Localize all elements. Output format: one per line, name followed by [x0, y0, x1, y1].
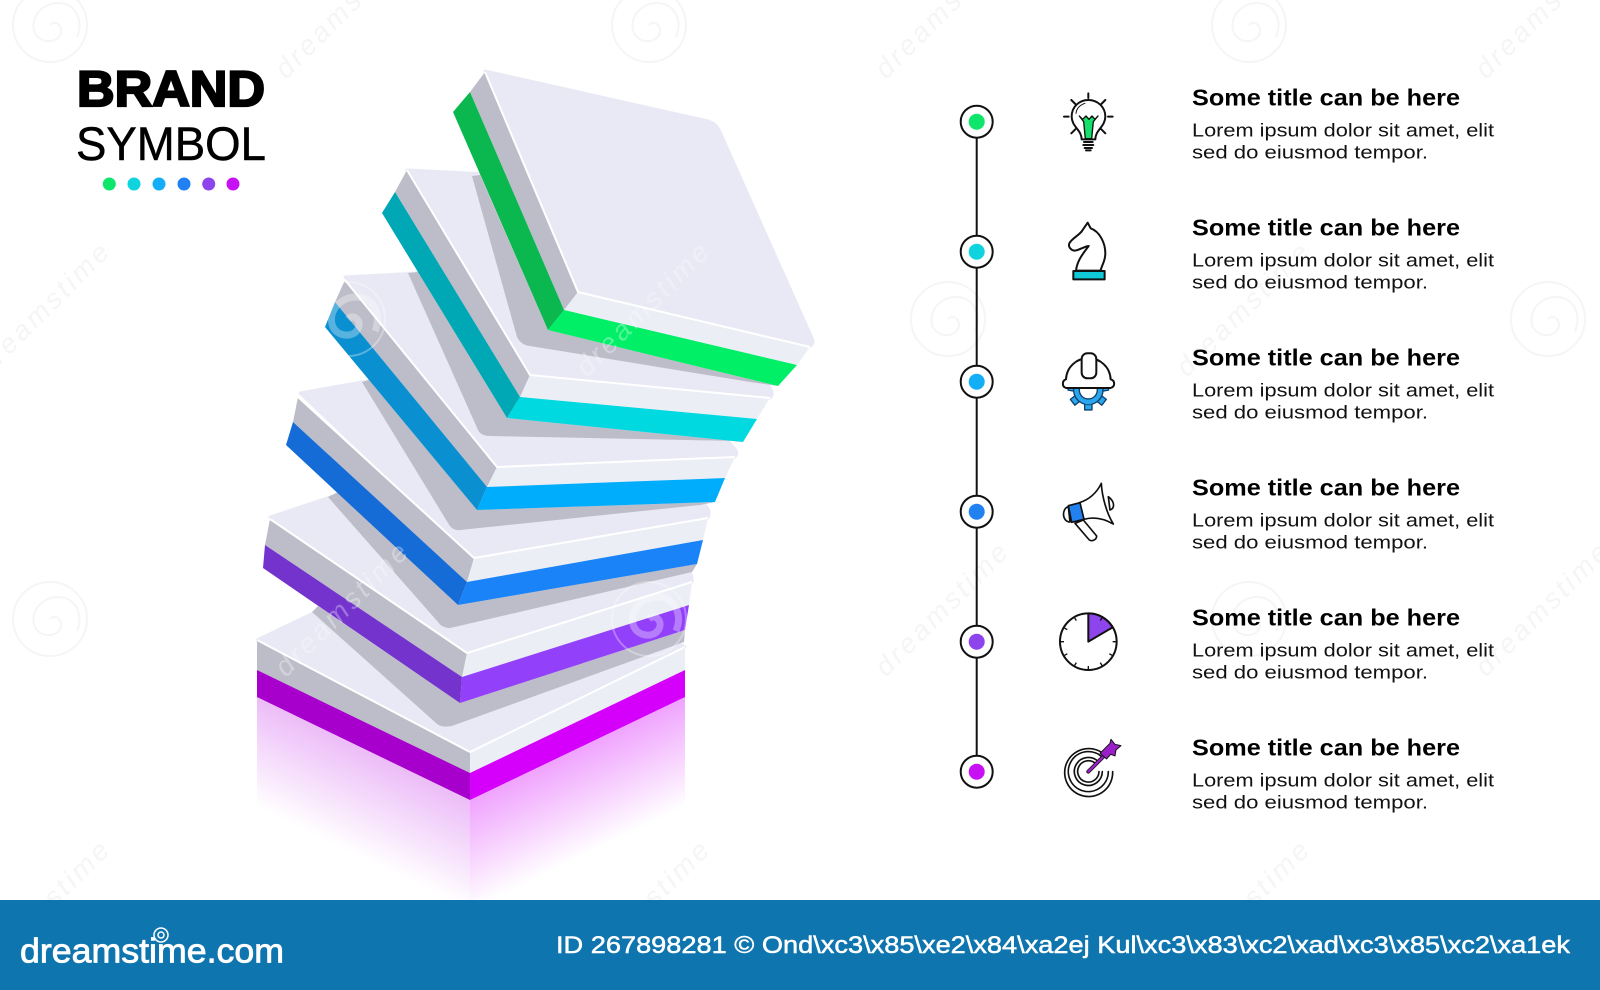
title: Some title can be here [1192, 345, 1460, 371]
node 5 [961, 626, 993, 658]
item 5 text [1192, 605, 1494, 683]
3D stack of slabs [257, 71, 813, 900]
background watermark spirals [13, 0, 1585, 656]
icon: helmet and gear [1063, 353, 1114, 410]
description: sed do eiusmod tempor. [1192, 403, 1428, 423]
watermark text on background: dreamstime [1169, 835, 1315, 980]
icon: megaphone [1064, 483, 1114, 541]
item 6 text [1192, 735, 1494, 813]
slab 5: purple [263, 442, 697, 703]
description: Lorem ipsum dolor sit amet, elit [1192, 641, 1494, 661]
slab 4: blue [286, 351, 715, 605]
timeline [961, 106, 993, 788]
description [1192, 771, 1494, 813]
slab 2: cyan [382, 170, 778, 442]
description: sed do eiusmod tempor. [1192, 533, 1428, 553]
icon: light bulb [1064, 93, 1113, 150]
description: Lorem ipsum dolor sit amet, elit [1192, 121, 1494, 141]
footer logo: dreamstime.com [20, 933, 284, 971]
watermarks over stack: dreamstime [268, 537, 414, 682]
brand logo [76, 61, 266, 190]
watermark text on background: dreamstime [569, 835, 715, 980]
icon: chess knight [1069, 223, 1105, 279]
symbol word: SYMBOL [76, 117, 266, 170]
description [1192, 251, 1494, 293]
item 2 text [1192, 215, 1494, 293]
slab 1: green [453, 71, 813, 386]
node 1 [961, 106, 993, 138]
description: sed do eiusmod tempor. [1192, 273, 1428, 293]
item 1 text [1192, 85, 1494, 163]
node 2 [961, 236, 993, 268]
description: sed do eiusmod tempor. [1192, 663, 1428, 683]
watermarks over stack [268, 237, 715, 682]
description: Lorem ipsum dolor sit amet, elit [1192, 251, 1494, 271]
description [1192, 121, 1494, 163]
icon: clock [1060, 613, 1117, 670]
description: Lorem ipsum dolor sit amet, elit [1192, 771, 1494, 791]
description: sed do eiusmod tempor. [1192, 793, 1428, 813]
icon: target with dart [1065, 739, 1121, 797]
title: Some title can be here [1192, 475, 1460, 501]
legend dots [103, 178, 240, 190]
title: Some title can be here [1192, 85, 1460, 111]
node 6 [961, 756, 993, 788]
node 3 [961, 366, 993, 398]
watermark text on background: dreamstime [1169, 237, 1315, 382]
description [1192, 381, 1494, 423]
item 3 text [1192, 345, 1494, 423]
title: Some title can be here [1192, 605, 1460, 631]
reflection under stack [257, 697, 685, 900]
description: sed do eiusmod tempor. [1192, 143, 1428, 163]
description: Lorem ipsum dolor sit amet, elit [1192, 511, 1494, 531]
description [1192, 641, 1494, 683]
watermarks over stack: dreamstime [569, 237, 715, 382]
brand word: BRAND [77, 61, 265, 117]
description [1192, 511, 1494, 553]
title: Some title can be here [1192, 215, 1460, 241]
slab 6: magenta [257, 537, 685, 800]
slab 3: sky blue [325, 264, 743, 510]
title: Some title can be here [1192, 735, 1460, 761]
description: Lorem ipsum dolor sit amet, elit [1192, 381, 1494, 401]
footer credit: ID 267898281 © Ond\xc3\x85\xe2\x84\xa2ej Kul\xc3\x83\xc2\xad\xc3\x85\xc2\xa1ek [556, 932, 1571, 959]
item 4 text [1192, 475, 1494, 553]
node 4 [961, 496, 993, 528]
watermark text on background: dreamstime [868, 537, 1014, 682]
footer bar [0, 900, 1600, 990]
